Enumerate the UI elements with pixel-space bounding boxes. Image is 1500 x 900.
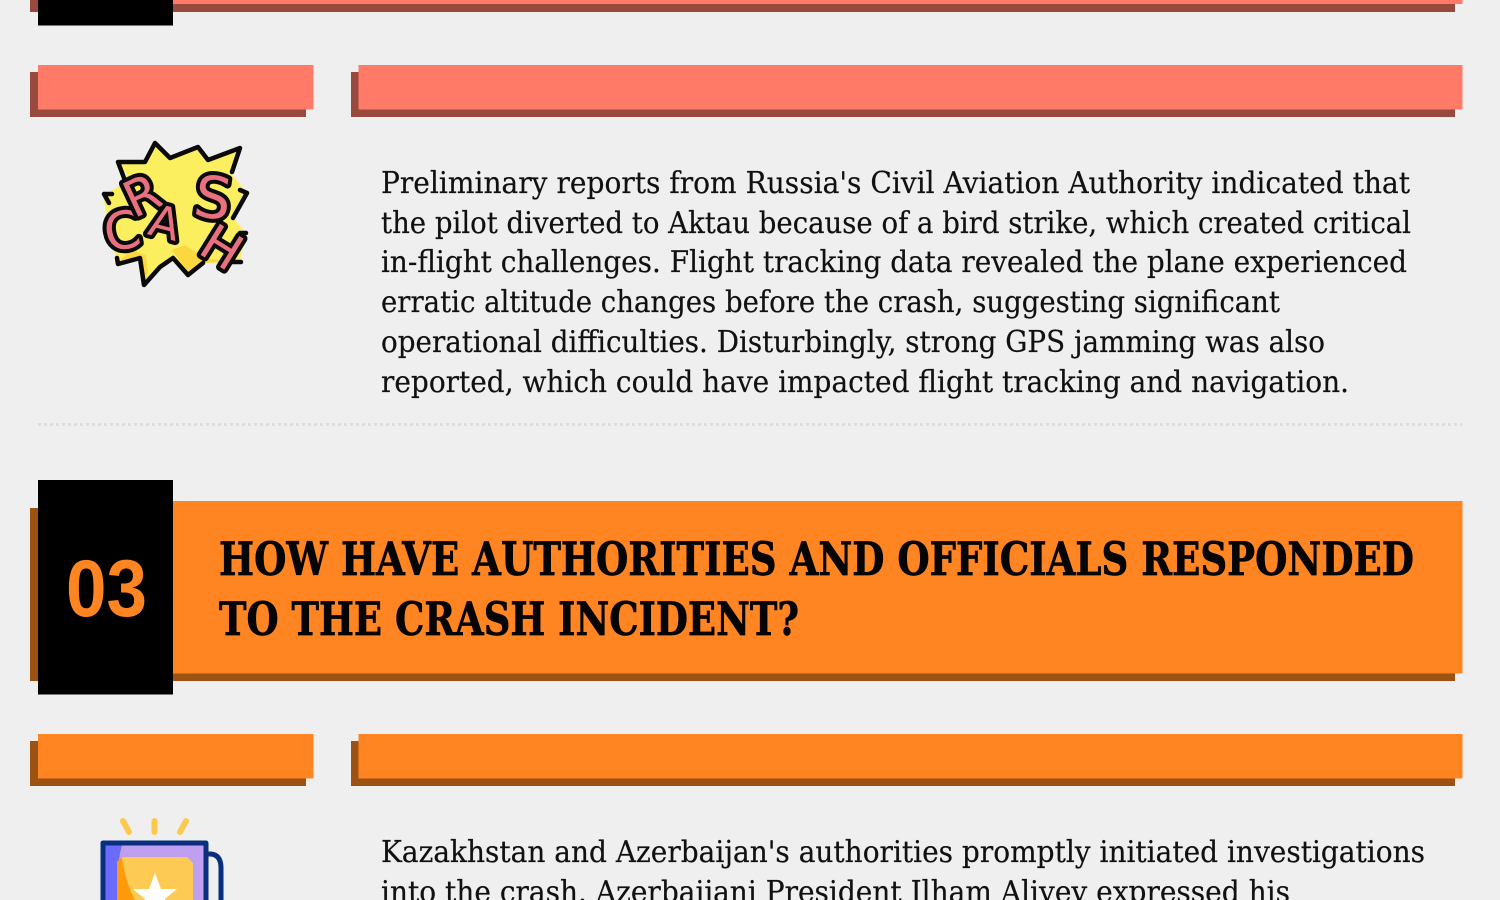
icon letters: R <box>114 162 170 230</box>
right sub-header bar: section 02 <box>351 65 1462 117</box>
body text: section 02: the pilot diverted to Aktau because of a bird strike, which created critical <box>381 206 1411 241</box>
body text: section 02: erratic altitude changes before the crash, suggesting significant <box>381 285 1280 320</box>
body text: section 02: in-flight challenges. Flight tracking data revealed the plane experienced <box>381 245 1407 280</box>
number badge 03 <box>38 480 173 694</box>
icon letters <box>99 162 253 282</box>
icon letters: S <box>190 162 236 234</box>
body text: section 02: reported, which could have impacted flight tracking and navigation. <box>381 365 1349 400</box>
number badge 03: 03 <box>66 544 147 634</box>
section 02 header band <box>30 0 1462 26</box>
body text: section 02: Preliminary reports from Russia's Civil Aviation Authority indicated that <box>381 166 1410 201</box>
left sub-header bar: section 03 <box>30 734 314 786</box>
section 03 header band <box>30 480 1462 694</box>
icon letters: A <box>144 195 185 252</box>
icon: crash explosion <box>99 143 253 285</box>
body text: section 03: Kazakhstan and Azerbaijan's authorities promptly initiated investigations <box>381 835 1425 870</box>
right sub-header bar: section 03 <box>351 734 1462 786</box>
body text: section 02: operational difficulties. Disturbingly, strong GPS jamming was also <box>381 325 1325 360</box>
icon letters: H <box>190 213 253 282</box>
section 03 heading: TO THE CRASH INCIDENT? <box>219 592 799 646</box>
section 03 heading <box>219 532 1414 646</box>
body text: section 03 <box>381 835 1425 900</box>
left sub-header bar: section 02 <box>30 65 314 117</box>
icon: mug with star badge <box>103 821 221 900</box>
icon letters: C <box>99 199 145 265</box>
body text: section 02 <box>381 166 1411 400</box>
